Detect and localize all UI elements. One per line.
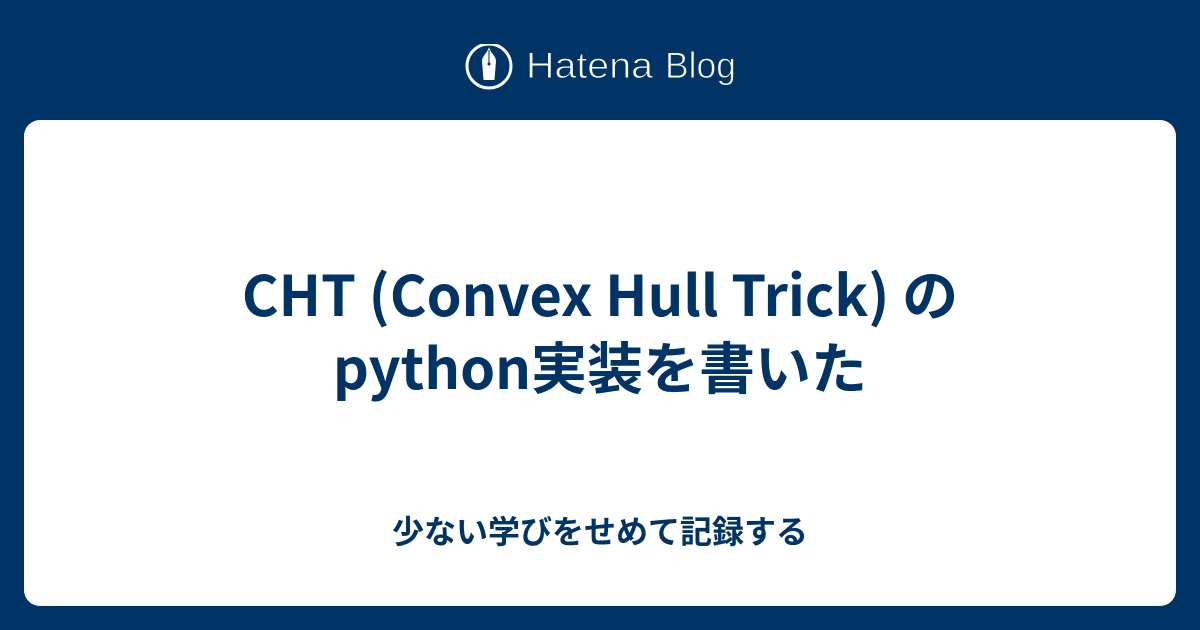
logo: Hatena Blog: [466, 44, 736, 90]
panel: white card: [24, 120, 1176, 606]
wordmark: [526, 45, 736, 86]
title: CHT (Convex Hull Trick) の: [242, 252, 958, 333]
wordmark: Blog: [665, 45, 736, 86]
wordmark: Hatena: [526, 45, 653, 86]
icon: pen nib in circle: [467, 44, 511, 88]
blog name: 少ない学びをせめて記録する: [392, 507, 808, 553]
title: python実装を書いた: [333, 325, 867, 406]
title: [242, 252, 958, 406]
